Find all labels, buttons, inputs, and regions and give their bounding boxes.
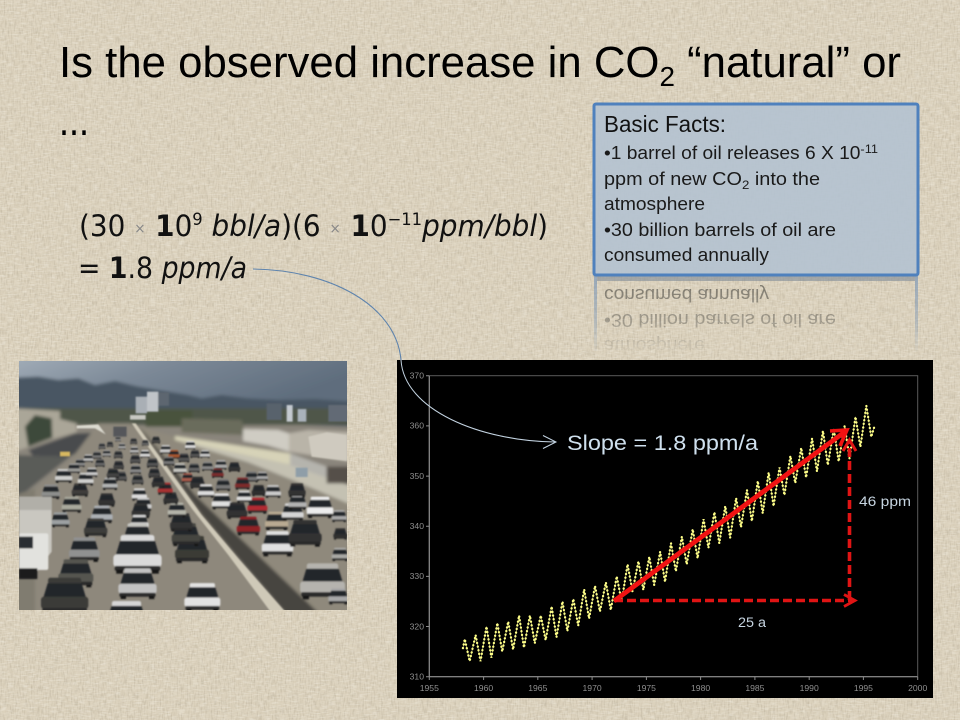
truck bbox=[19, 509, 54, 556]
facts text: •30 billion barrels of oil are bbox=[604, 220, 836, 240]
y axis labels: 320 bbox=[410, 621, 424, 631]
equation: 0 bbox=[370, 209, 388, 243]
arrow: vertical 46 ppm rise bbox=[843, 440, 856, 600]
facts text: into the bbox=[749, 169, 820, 189]
equation: 1 bbox=[341, 209, 370, 243]
equation bbox=[78, 209, 548, 285]
chart axes and frame bbox=[426, 376, 918, 680]
x axis labels: 1960 bbox=[474, 683, 493, 693]
equation: ) bbox=[537, 209, 548, 243]
equation: 0 bbox=[175, 209, 193, 243]
equation: × bbox=[329, 221, 341, 237]
x axis labels: 1965 bbox=[528, 683, 548, 693]
facts text: 2 bbox=[742, 178, 750, 192]
x axis labels bbox=[420, 683, 927, 693]
title: Is the observed increase in CO bbox=[59, 38, 663, 87]
arrow: curved connector from result to slope label bbox=[253, 269, 556, 448]
facts text bbox=[604, 142, 878, 265]
y axis labels: 340 bbox=[410, 521, 424, 531]
equation: bbl/a bbox=[203, 209, 281, 243]
label: slope: Slope = 1.8 ppm/a bbox=[567, 432, 758, 455]
equation: 9 bbox=[192, 210, 203, 230]
title: 2 bbox=[659, 61, 675, 92]
panel: basic facts bbox=[594, 104, 918, 275]
panel: basic facts reflection: consumed annually bbox=[604, 285, 769, 305]
equation: = 1.8 ppm/a bbox=[78, 251, 247, 285]
y axis labels: 370 bbox=[410, 370, 424, 380]
photo: freeway traffic jam bbox=[19, 361, 347, 610]
y axis labels: 350 bbox=[410, 471, 424, 481]
distant cars bbox=[75, 427, 268, 483]
label: 46 ppm: 46 ppm bbox=[859, 494, 911, 509]
data series: Mauna Loa monthly CO2 bbox=[463, 406, 874, 661]
x axis labels: 1980 bbox=[691, 683, 710, 693]
x axis labels: 1975 bbox=[637, 683, 656, 693]
label: 25 a: 25 a bbox=[738, 615, 767, 630]
x axis labels: 2000 bbox=[908, 683, 927, 693]
equation: )(6 bbox=[281, 209, 322, 243]
title: “natural” or bbox=[675, 38, 901, 87]
title bbox=[59, 38, 901, 145]
facts text: ppm of new CO bbox=[604, 169, 729, 189]
equation: ppm/bbl bbox=[421, 209, 537, 243]
panel: basic facts reflection bbox=[594, 275, 918, 356]
x axis labels: 1990 bbox=[800, 683, 819, 693]
x axis labels: 1985 bbox=[745, 683, 765, 693]
x axis labels: 1970 bbox=[583, 683, 602, 693]
arrow: slope bbox=[614, 430, 847, 601]
chart panel: CO2 concentration bbox=[397, 360, 933, 698]
y axis labels: 360 bbox=[410, 421, 424, 431]
arrow: horizontal 25 a run bbox=[614, 594, 855, 606]
equation: × bbox=[134, 221, 145, 237]
equation: −11 bbox=[388, 210, 422, 230]
x axis labels: 1995 bbox=[854, 683, 873, 693]
heading: basic facts: Basic Facts: bbox=[604, 111, 726, 137]
x axis labels: 1955 bbox=[420, 683, 439, 693]
facts text: •1 barrel of oil releases 6 X 10 bbox=[604, 143, 844, 163]
facts text: atmosphere bbox=[604, 194, 705, 214]
equation: 1 bbox=[145, 209, 175, 243]
y axis labels: 330 bbox=[410, 571, 424, 581]
y axis labels bbox=[410, 370, 424, 682]
facts text: consumed annually bbox=[604, 245, 769, 265]
facts text: -11 bbox=[860, 142, 878, 156]
title: ... bbox=[59, 96, 89, 145]
panel: basic facts reflection: •30 billion barrels of oil are bbox=[604, 310, 836, 330]
y axis labels: 310 bbox=[410, 672, 424, 682]
panel: basic facts reflection: atmosphere bbox=[604, 336, 705, 356]
equation: (30 bbox=[79, 209, 127, 243]
